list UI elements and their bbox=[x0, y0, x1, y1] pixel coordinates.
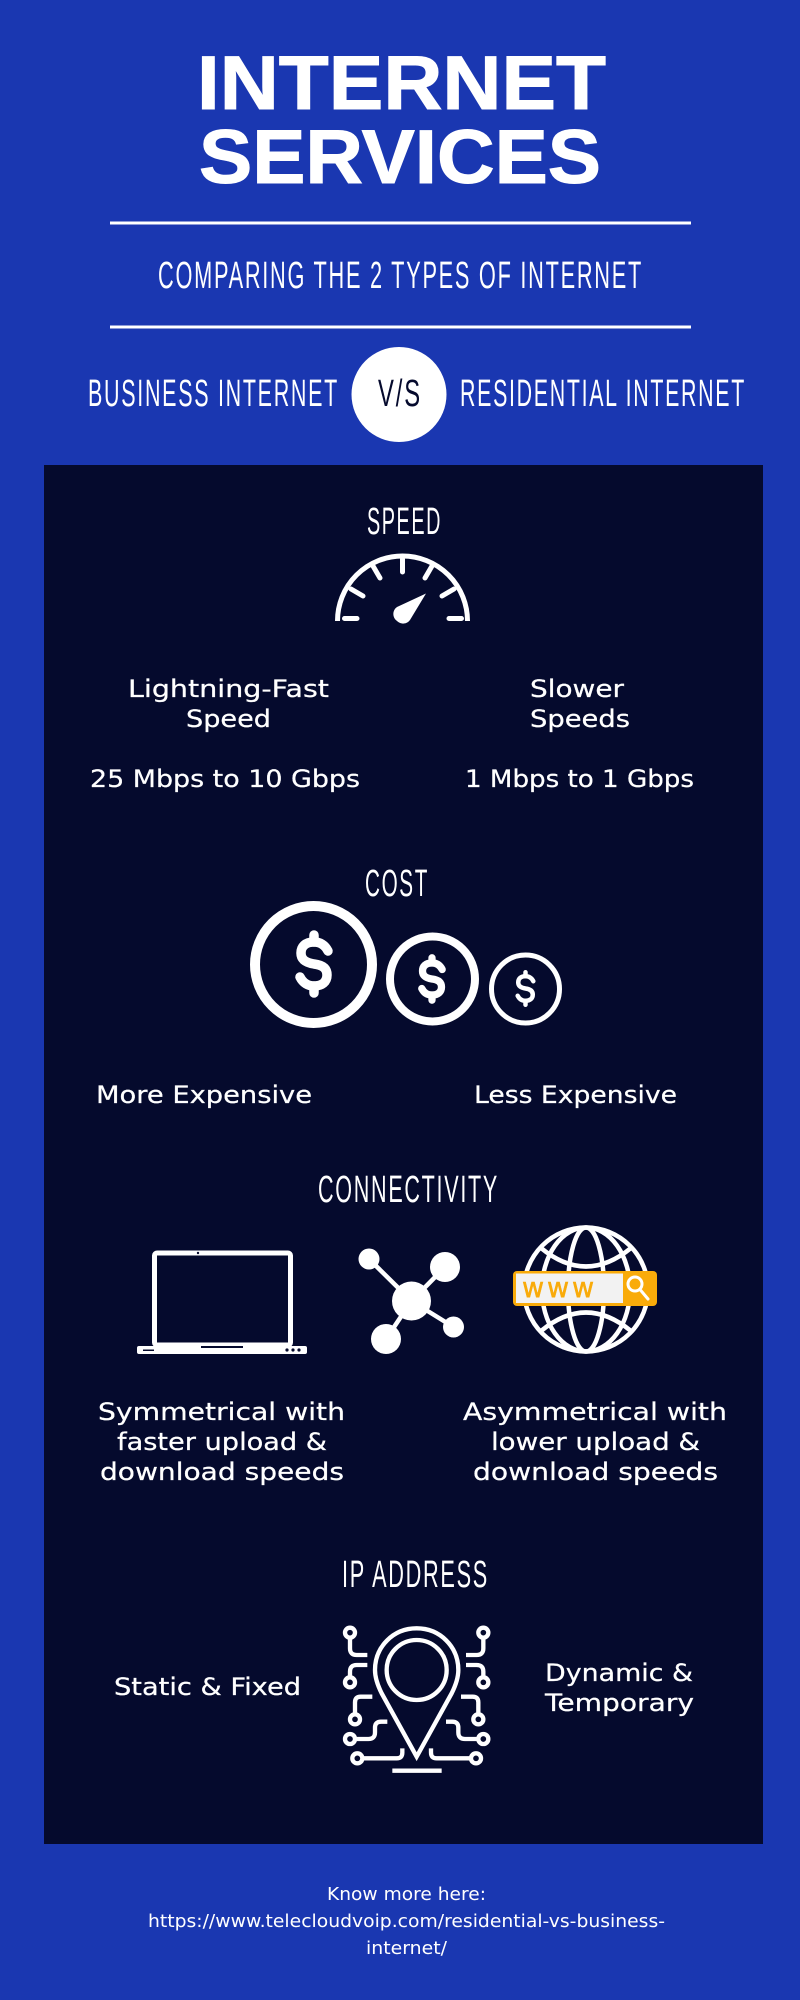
section: speed bbox=[90, 501, 694, 793]
text: business ip: Static & Fixed bbox=[114, 1673, 301, 1701]
heading: speed: SPEED bbox=[367, 501, 442, 543]
title bbox=[197, 41, 606, 200]
text: residential connectivity: download speeds bbox=[473, 1458, 718, 1486]
text: residential speed: 1 Mbps to 1 Gbps bbox=[465, 765, 694, 793]
text: residential ip bbox=[544, 1659, 694, 1717]
text: business connectivity: faster upload & bbox=[117, 1428, 327, 1456]
badge: v/s: V/S bbox=[378, 373, 422, 415]
section: connectivity bbox=[98, 1169, 727, 1486]
text: business speed: Speed bbox=[186, 705, 271, 733]
text: business cost: More Expensive bbox=[96, 1081, 312, 1109]
heading: ip address: IP ADDRESS bbox=[342, 1554, 489, 1596]
text: business speed: Lightning-Fast bbox=[128, 675, 329, 703]
title: SERVICES bbox=[199, 115, 601, 200]
text: residential ip: Temporary bbox=[544, 1689, 694, 1717]
heading: cost: COST bbox=[365, 863, 429, 905]
label: business internet: BUSINESS INTERNET bbox=[88, 373, 339, 415]
text: residential connectivity: lower upload & bbox=[491, 1428, 700, 1456]
footer: source link: https://www.telecloudvoip.com/residential-vs-business- bbox=[148, 1911, 665, 1932]
text: business connectivity: Symmetrical with bbox=[98, 1398, 345, 1426]
icon: globe with www search bar bbox=[513, 1228, 657, 1352]
section: ip address bbox=[114, 1554, 694, 1771]
comparison header: business v/s residential bbox=[88, 347, 746, 442]
text: residential speed bbox=[465, 675, 694, 793]
footer: source link bbox=[148, 1884, 665, 1959]
footer: source link: internet/ bbox=[366, 1938, 448, 1959]
text: business connectivity: download speeds bbox=[100, 1458, 344, 1486]
icon: network nodes bbox=[358, 1248, 464, 1354]
icon: dollar coins bbox=[255, 906, 560, 1023]
icon: globe with www search bar: www bbox=[522, 1271, 597, 1304]
text: residential ip: Dynamic & bbox=[545, 1659, 693, 1687]
text: residential connectivity bbox=[463, 1398, 727, 1486]
heading: connectivity: CONNECTIVITY bbox=[318, 1169, 499, 1211]
footer: source link: Know more here: bbox=[327, 1884, 486, 1905]
icon: laptop bbox=[137, 1252, 307, 1354]
section: cost bbox=[96, 863, 677, 1109]
text: business connectivity bbox=[98, 1398, 345, 1486]
text: residential speed: Slower bbox=[530, 675, 624, 703]
text: residential speed: Speeds bbox=[530, 705, 630, 733]
text: residential cost: Less Expensive bbox=[474, 1081, 677, 1109]
text: residential connectivity: Asymmetrical with bbox=[463, 1398, 727, 1426]
text: business speed bbox=[90, 675, 360, 793]
badge: v/s bbox=[352, 347, 446, 442]
icon: speedometer bbox=[338, 556, 468, 624]
title: INTERNET bbox=[197, 41, 606, 126]
text: business speed: 25 Mbps to 10 Gbps bbox=[90, 765, 360, 793]
panel: comparison bbox=[44, 465, 763, 1844]
icon: location pin with circuit lines bbox=[345, 1628, 488, 1771]
